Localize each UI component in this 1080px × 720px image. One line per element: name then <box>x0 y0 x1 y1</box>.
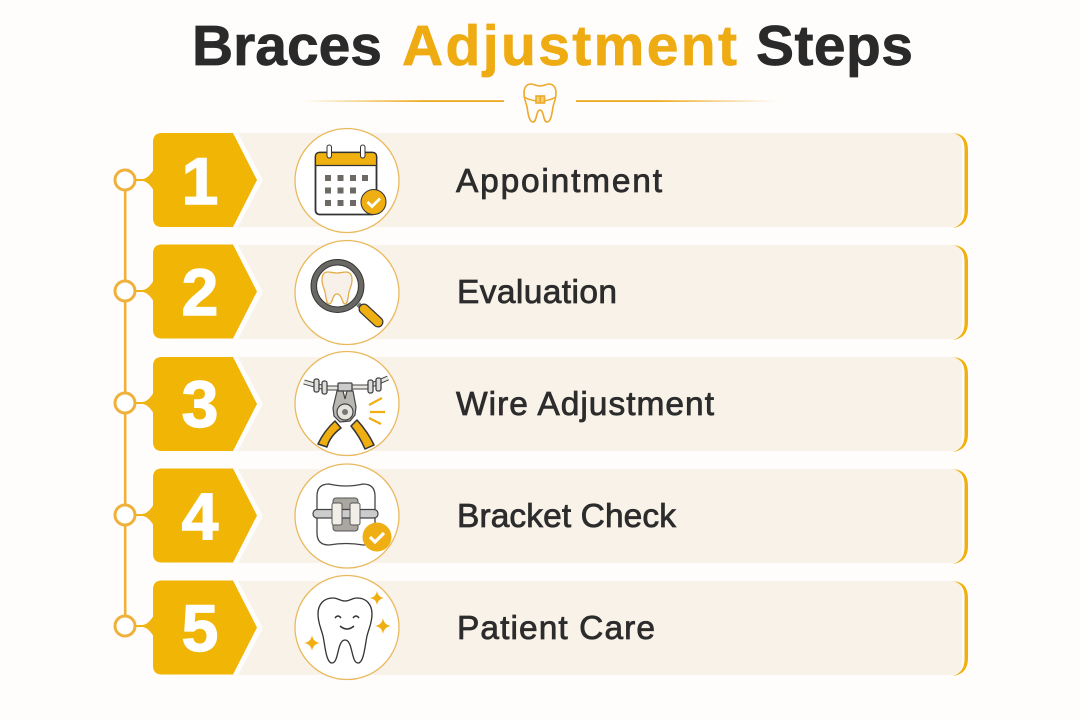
title: Adjustment <box>402 14 737 78</box>
panel accent <box>953 245 968 340</box>
number badge 4 <box>153 468 257 562</box>
icon circle <box>295 576 399 680</box>
icon: magnifier on tooth <box>314 262 378 322</box>
icon: calendar <box>316 145 386 214</box>
title: Steps <box>756 14 913 78</box>
icon circle <box>295 352 399 456</box>
timeline node 5 <box>115 615 154 637</box>
panel: step 5 background <box>238 581 962 675</box>
icon circle <box>295 240 399 344</box>
icon: smiling tooth with sparkles <box>304 591 391 663</box>
number badge 2 <box>153 244 257 338</box>
number badge 5 <box>153 580 257 674</box>
label: Patient Care <box>457 610 655 647</box>
title: Braces <box>192 14 382 78</box>
icon circle <box>295 464 399 568</box>
timeline node 1 <box>115 169 154 191</box>
step 1 row <box>115 128 968 232</box>
icon: tooth with bracket <box>524 84 556 122</box>
number badge 3: 3 <box>182 367 218 441</box>
icon circle <box>295 128 399 232</box>
timeline node 3 <box>115 392 154 414</box>
number badge 2: 2 <box>182 255 218 329</box>
panel: step 1 background <box>238 133 962 227</box>
number badge 1 <box>153 133 257 227</box>
number badge 4: 4 <box>182 479 219 553</box>
timeline node 4 <box>115 504 154 526</box>
title <box>192 14 913 78</box>
step 3 row <box>115 352 968 456</box>
panel: step 2 background <box>238 245 962 339</box>
number badge 1: 1 <box>182 144 218 218</box>
panel accent <box>953 133 968 228</box>
label: Bracket Check <box>457 498 676 535</box>
panel accent <box>953 581 968 676</box>
step 2 row <box>115 240 968 344</box>
panel accent <box>953 469 968 564</box>
step 5 row <box>115 576 968 680</box>
number badge 5: 5 <box>182 591 218 665</box>
label: Evaluation <box>457 274 617 311</box>
label: Appointment <box>456 163 663 200</box>
panel accent <box>953 357 968 452</box>
title divider with tooth icon <box>303 84 776 122</box>
timeline connector <box>124 190 126 618</box>
panel: step 4 background <box>238 469 962 563</box>
label: Wire Adjustment <box>456 386 715 423</box>
panel: step 3 background <box>238 357 962 451</box>
timeline node 2 <box>115 280 154 302</box>
step 4 row <box>115 464 968 568</box>
icon: pliers on wire <box>304 378 388 449</box>
number badge 3 <box>153 357 257 451</box>
icon: bracket check <box>313 484 392 552</box>
